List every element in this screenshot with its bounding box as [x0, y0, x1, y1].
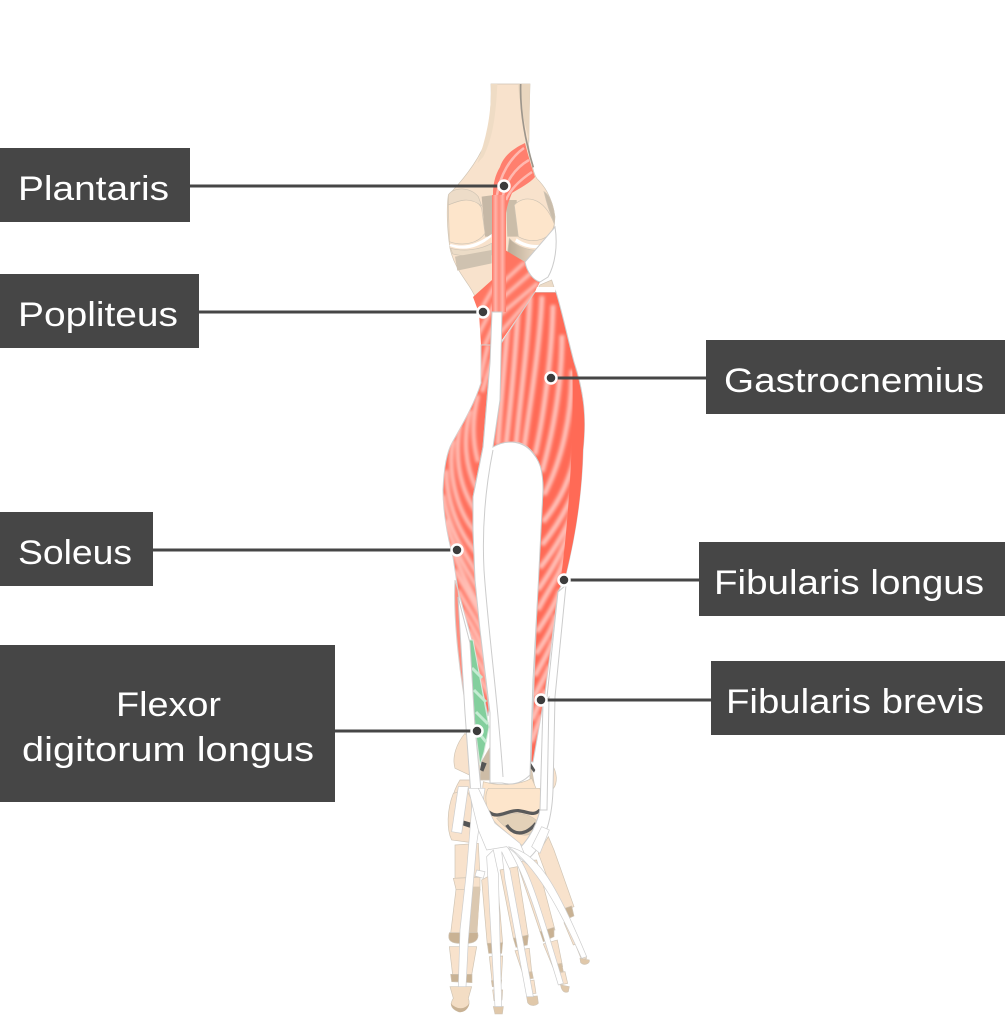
- label: Fibularis longus: Fibularis longus: [714, 564, 984, 602]
- muscle: popliteus: [472, 250, 540, 352]
- muscle: soleus: [443, 345, 494, 722]
- muscle: flexor digitorum longus: [469, 640, 489, 765]
- tendons: foot: [452, 787, 587, 1007]
- label: Popliteus: Popliteus: [18, 296, 178, 334]
- label: Flexor digitorum longus: digitorum longus: [22, 731, 314, 769]
- lateral tendon: [458, 597, 481, 820]
- label: Gastrocnemius: Gastrocnemius: [724, 362, 984, 400]
- leg bones: [447, 84, 589, 1014]
- label: Flexor digitorum longus: [0, 645, 482, 802]
- lateral knee tendon: [525, 227, 556, 282]
- label: Flexor digitorum longus: Flexor: [116, 686, 221, 724]
- soleus lateral strip: [455, 580, 469, 722]
- fibularis longus tendon: [518, 585, 566, 860]
- label: Soleus: Soleus: [18, 534, 132, 572]
- muscle: plantaris: [492, 143, 535, 312]
- label: Fibularis longus: [558, 542, 1005, 616]
- calcaneal tendon: [473, 312, 543, 784]
- label: Plantaris: Plantaris: [18, 170, 169, 208]
- label: Soleus: [0, 512, 462, 586]
- label: Plantaris: [0, 148, 510, 222]
- ankle and foot bones: [452, 733, 556, 813]
- tendons: white central and lateral: [458, 227, 566, 860]
- label: Popliteus: [0, 274, 488, 348]
- muscle: gastrocnemius: [493, 292, 584, 762]
- fibularis brevis tendon: [540, 697, 549, 810]
- label: Fibularis brevis: Fibularis brevis: [726, 683, 984, 721]
- label: Fibularis brevis: [536, 661, 1005, 735]
- head patch: [535, 287, 555, 292]
- label: Gastrocnemius: [546, 340, 1005, 414]
- femur and knee: [447, 84, 556, 297]
